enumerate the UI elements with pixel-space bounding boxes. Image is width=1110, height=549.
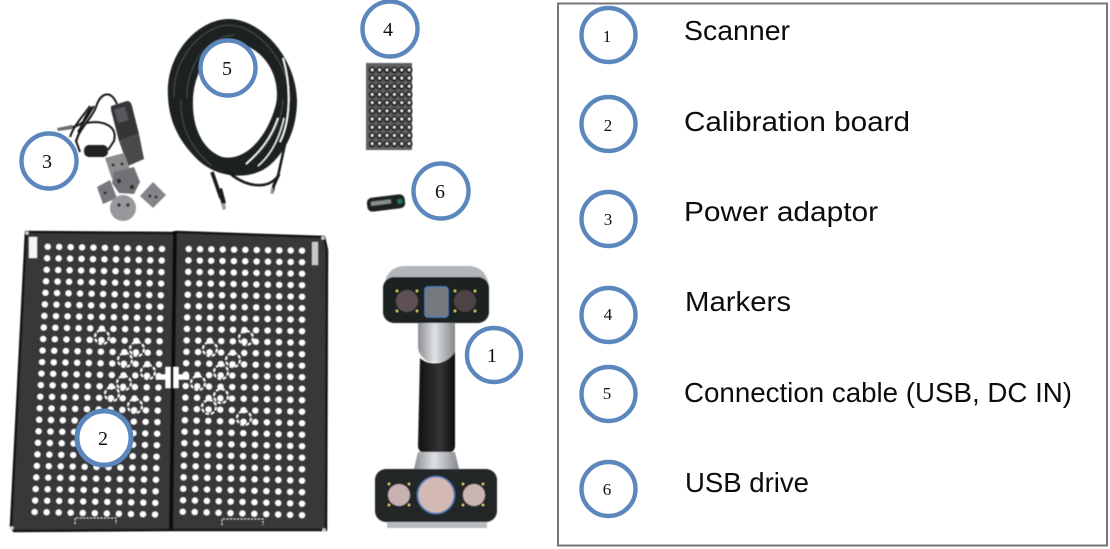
DC plug (272, 174, 279, 193)
scanner neck (418, 322, 455, 362)
adaptor body (111, 101, 139, 141)
scanner lower collar (414, 452, 459, 469)
plug tip c (97, 180, 117, 204)
callout 5: 5 (222, 58, 232, 80)
legend row 6: USB drive (685, 467, 809, 498)
callout 2 (77, 411, 131, 465)
USB lead (212, 172, 221, 198)
board bottom notches (75, 518, 263, 525)
right panel dot grid (183, 249, 302, 515)
left panel dot grid (34, 247, 162, 514)
legend row 1 (582, 8, 790, 62)
USB plug (217, 188, 226, 205)
callout 3 (22, 134, 76, 188)
callout 2: 2 (98, 428, 108, 450)
legend row 2: Calibration board (684, 106, 910, 137)
bottom centre lens (418, 476, 454, 514)
legend row 5: 5 (603, 384, 611, 403)
markers grid (368, 66, 412, 148)
legend row 3: Power adaptor (684, 196, 878, 227)
legend row 4 (582, 286, 791, 342)
legend row 4: Markers (685, 286, 791, 317)
callout 4 (362, 2, 418, 56)
bottom LED dots (388, 483, 484, 506)
callout 4: 4 (383, 19, 393, 41)
plug tip d (140, 182, 166, 208)
plug tip a (105, 153, 131, 179)
scanner bottom head (375, 469, 497, 522)
scanner grip (418, 352, 455, 453)
legend row 2 (582, 97, 910, 151)
legend panel (558, 4, 1107, 546)
callout 5 (200, 40, 256, 96)
board alignment targets (95, 330, 253, 425)
callout 1: 1 (487, 345, 497, 367)
cable strand highlights (174, 25, 290, 166)
legend row 5 (582, 367, 1072, 421)
adaptor DC tip (57, 125, 73, 131)
adaptor label detail (114, 107, 129, 123)
callout 6: 6 (435, 181, 445, 203)
connection cable (168, 19, 297, 210)
plug tip prongs (104, 162, 158, 207)
top centre window (425, 287, 448, 317)
callout 1 (467, 328, 521, 382)
board right label strip (312, 242, 318, 265)
legend row 2: 2 (604, 116, 612, 135)
legend frame (558, 4, 1107, 546)
legend row 1: Scanner (684, 15, 790, 46)
board centre cross marks (156, 367, 189, 388)
board corner rivets (10, 231, 326, 532)
scanner base plate (387, 518, 487, 528)
legend row 3 (582, 192, 878, 246)
legend row 6 (582, 462, 809, 516)
cable coil (168, 19, 297, 176)
drive LED (397, 198, 403, 204)
markers sheet (366, 63, 412, 150)
board left label strip (29, 237, 37, 258)
drive label (371, 199, 391, 206)
legend row 4: 4 (604, 305, 613, 324)
legend row 5: Connection cable (USB, DC IN) (684, 377, 1072, 408)
legend row 3: 3 (604, 210, 612, 229)
USB drive (366, 194, 406, 212)
plug tip b (112, 167, 140, 194)
plug tip e (110, 195, 136, 221)
power adaptor (57, 94, 166, 221)
callout 3: 3 (42, 151, 52, 173)
markers box (366, 63, 412, 150)
adaptor wires (70, 94, 117, 152)
top LED dots (396, 290, 476, 312)
callout 6 (414, 164, 468, 218)
top right lens (454, 290, 476, 312)
DC lead (226, 135, 287, 185)
adaptor ferrite bead (84, 145, 108, 157)
board plate (11, 232, 327, 531)
cable outer strand gaps (246, 58, 289, 166)
bottom left lens (388, 484, 410, 506)
top left lens (396, 290, 418, 312)
drive body (366, 194, 406, 212)
scanner top head (383, 277, 489, 323)
adaptor plug head (119, 134, 144, 166)
bottom right lens (463, 484, 485, 506)
legend row 6: 6 (603, 480, 611, 499)
calibration board (10, 231, 327, 532)
scanner top cap (384, 266, 489, 290)
scanner (375, 266, 497, 528)
legend row 1: 1 (603, 27, 611, 46)
board centre hinge (171, 232, 175, 531)
